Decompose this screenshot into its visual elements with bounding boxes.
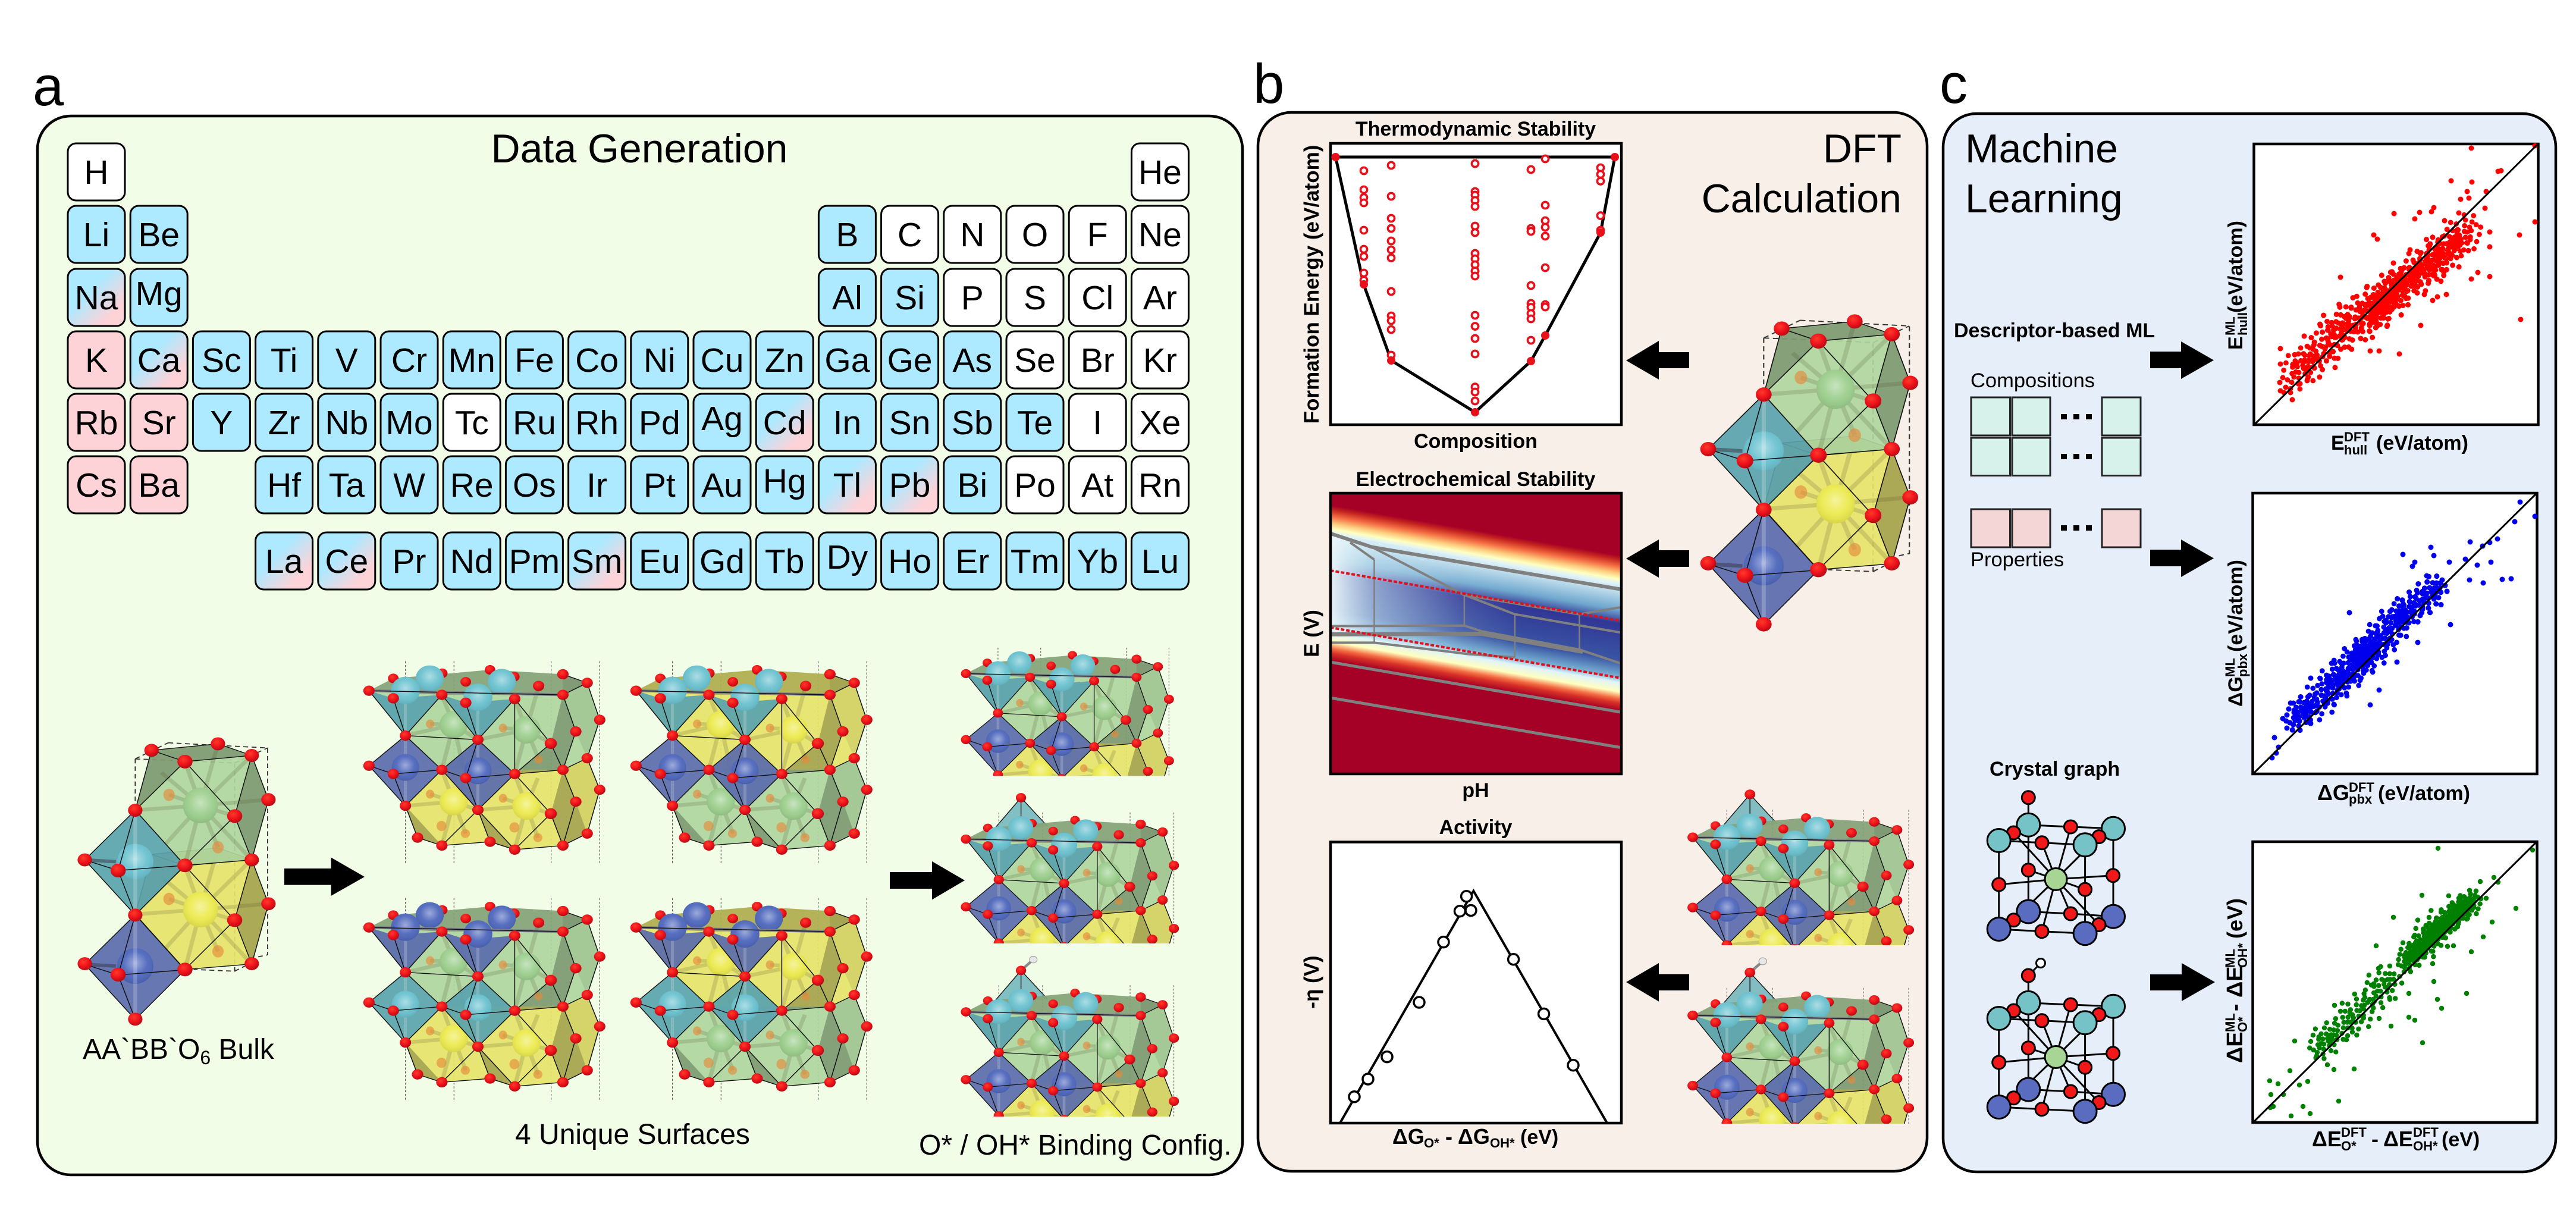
panel background: DFT calculation [1258,112,1927,1171]
periodic table: Re [450,466,494,504]
chart: thermodynamic stability [1300,118,1621,453]
plot frame [2253,842,2537,1122]
periodic table: Ho [888,543,931,581]
chart title: Electrochemical Stability [1356,468,1595,491]
periodic table: P [961,279,984,317]
panel background: machine learning [1943,114,2556,1172]
x axis label: ΔG [1458,1124,1490,1149]
periodic table: Se [1014,341,1056,380]
periodic table: Tc [455,404,489,442]
periodic table: At [1081,466,1113,504]
y axis label: ML [2223,316,2238,335]
y axis label: Formation Energy (eV/atom) [1300,145,1323,424]
periodic table: Ag [701,400,743,438]
heading: DFT calculation: Calculation [1702,176,1902,221]
periodic table: Ne [1138,216,1182,254]
periodic table: Ga [824,341,870,380]
y axis label: ΔG [2224,676,2247,707]
bulk caption: 6 [200,1047,211,1068]
surface structure 4 [630,898,873,1100]
periodic table: Cd [763,404,807,442]
chart title: Thermodynamic Stability [1356,118,1596,140]
chart frame [1331,842,1621,1123]
x axis label: DFT [2344,429,2370,444]
x axis label: (eV) [1520,1126,1558,1149]
periodic table: Au [701,466,743,504]
periodic table: Y [210,404,233,442]
y axis label: hull [2235,312,2250,335]
x axis label: DFT [2413,1125,2439,1140]
scatter points [2272,502,2535,758]
bulk perovskite structure [1700,314,1918,632]
periodic table: Yb [1077,543,1118,581]
heading: machine learning: Learning [1965,176,2123,221]
periodic table: Cl [1081,279,1113,317]
periodic table: Cr [391,341,427,380]
periodic table: Hf [267,466,301,504]
periodic table: Hg [763,462,807,500]
volcano lines [1340,891,1607,1123]
heading: machine learning: Machine [1965,126,2118,171]
periodic table: Tb [765,543,804,581]
periodic table: Tm [1011,543,1059,581]
x axis label: E [2331,432,2345,454]
x axis label [2312,1125,2480,1153]
plot frame [2253,493,2537,774]
chart frame [1331,493,1621,774]
periodic table: As [953,341,992,380]
crystal graph: O adsorbate [1987,791,2125,945]
periodic table: Ca [137,341,181,380]
x axis label: - [1445,1124,1452,1149]
periodic table: W [393,466,425,504]
x axis label: O* [1424,1136,1439,1150]
periodic table: Pm [509,543,560,581]
periodic table: Cs [76,466,117,504]
plot frame [2254,144,2539,425]
periodic table: Ar [1143,279,1177,317]
bulk caption: AA`BB`O [83,1034,200,1065]
bulk perovskite structure [77,737,275,1026]
crystal graph heading: Crystal graph [1990,758,2120,780]
water stability window [1331,570,1620,678]
x axis label: ΔE [2383,1127,2413,1151]
periodic table: C [898,216,922,254]
adsorbate structure: O [1687,789,1914,945]
arrow to electrochemical stability [1626,540,1689,578]
arrow to hull parity plot [2150,341,2214,379]
chart frame [1331,143,1621,425]
panel label a: a [33,55,64,117]
x axis label: (eV) [2442,1128,2480,1151]
x axis label: pH [1462,779,1489,802]
panel label c: c [1940,52,1968,115]
periodic table: Cu [701,341,743,380]
periodic table: S [1024,279,1046,317]
x axis label: pbx [2349,792,2373,807]
periodic table: Ce [325,543,368,581]
heading: DFT calculation: DFT [1823,126,1902,171]
periodic table: Pt [644,466,676,504]
periodic table: Bi [957,466,987,504]
data points [1349,891,1579,1102]
convex hull line [1336,157,1615,412]
x axis label: hull [2344,443,2367,457]
y axis label: ML [2223,949,2238,968]
periodic table: Si [895,279,925,317]
periodic table: Sm [572,543,622,581]
x axis label: ΔE [2312,1127,2342,1151]
x axis label [2331,429,2468,457]
x axis label: ΔG [1392,1124,1425,1149]
parity line [2254,144,2538,425]
crystal graph: OH adsorbate [1987,959,2125,1123]
periodic table: Mn [448,341,495,380]
periodic table: Nd [450,543,494,581]
composition descriptor grid [1971,397,2141,476]
periodic table: Zr [268,404,300,442]
y axis label: ΔE [2223,966,2248,998]
y axis label [2223,560,2250,707]
periodic table: Eu [639,543,680,581]
surfaces caption: 4 Unique Surfaces [515,1119,750,1150]
parity plot: Pourbaix decomposition energy [2223,493,2537,807]
panel: machine learning [1943,114,2556,1172]
y axis label: ML [2223,1013,2238,1032]
binding configuration caption: O* / OH* Binding Config. [919,1130,1232,1161]
y axis label [2223,221,2250,350]
periodic table: Ti [271,341,297,380]
surface structure 3 [363,898,605,1100]
scatter points [2270,848,2533,1116]
surface structure 2 [630,661,873,863]
chart: electrochemical stability [1304,471,1623,801]
periodic table: Sc [202,341,241,380]
y axis label: OH* [2235,943,2250,968]
periodic table: Rb [75,404,118,442]
arrow to activity [1626,963,1689,1002]
periodic table: Dy [827,538,868,576]
periodic table: K [85,341,108,380]
stable compositions on the hull [1331,153,1619,416]
heading: data generation: Data Generation [491,126,787,171]
y axis label: ΔE [2223,1031,2248,1063]
periodic table: Mo [385,404,433,442]
periodic table: Gd [699,543,745,581]
adsorbate structure: OH [1687,958,1914,1124]
x axis label: OH* [2413,1139,2438,1153]
arrow: bulk to surfaces [284,858,365,896]
periodic table: Fe [514,341,554,380]
arrow to thermodynamic stability [1626,341,1689,380]
periodic table: Ni [644,341,676,380]
periodic table: Na [75,279,118,317]
x axis label: O* [2341,1139,2357,1153]
x axis label: Composition [1414,430,1538,453]
unstable compositions [1360,155,1604,405]
periodic table: H [84,153,109,192]
bulk caption: Bulk [211,1034,275,1065]
periodic table: Ir [586,466,607,504]
y axis label: - [2223,1004,2248,1011]
periodic table: Xe [1140,404,1181,442]
x axis label: ΔG [2317,780,2349,805]
panel background: data generation [37,116,1242,1175]
arrow to binding energy parity plot [2150,963,2215,1001]
binding configuration: OH adsorbate [961,955,1179,1117]
periodic table: He [1138,153,1182,192]
y axis label: O* [2235,1017,2250,1032]
periodic table: V [335,341,358,380]
periodic table: Te [1017,404,1053,442]
periodic table: Zn [765,341,804,380]
periodic table: Pb [889,466,930,504]
x axis label: (eV/atom) [2378,782,2470,805]
periodic table: B [836,216,858,254]
x axis label: OH* [1490,1136,1515,1150]
chart title: Activity [1439,816,1512,839]
properties label: Properties [1971,548,2064,571]
scatter points [2273,146,2535,400]
periodic table: Sr [142,404,176,442]
periodic table [68,143,1188,590]
panel label b: b [1253,52,1284,115]
periodic table: Li [83,216,109,254]
periodic table: Be [138,216,180,254]
periodic table: Pr [393,543,426,581]
compositions label: Compositions [1971,369,2095,392]
periodic table: Nb [325,404,368,442]
y axis label: E [2224,336,2247,350]
periodic table: Ge [887,341,933,380]
heatmap [1332,494,1620,773]
x axis label: DFT [2349,780,2374,795]
y axis label [2223,898,2250,1063]
periodic table: Er [955,543,989,581]
parity plot: binding energy difference [2223,842,2537,1153]
arrow to Pourbaix parity plot [2150,540,2214,577]
x axis label: DFT [2341,1125,2367,1140]
periodic table: I [1093,404,1102,442]
x axis label [2317,780,2470,807]
periodic table: In [833,404,861,442]
descriptor heading: Descriptor-based ML [1954,319,2155,342]
periodic table: Tl [833,466,861,504]
periodic table: Sn [889,404,930,442]
periodic table: F [1087,216,1108,254]
periodic table: Rh [575,404,619,442]
periodic table: Os [513,466,556,504]
arrow: surfaces to binding configurations [890,861,965,899]
x axis label [1392,1124,1558,1150]
periodic table: Al [832,279,862,317]
stability phase boundaries [1331,534,1620,747]
panel: data generation [37,116,1242,1175]
periodic table: Br [1081,341,1115,380]
periodic table: Mg [136,275,183,313]
periodic table: Po [1014,466,1056,504]
periodic table: Rn [1138,466,1182,504]
periodic table: Ba [138,466,180,504]
y axis label: (eV/atom) [2224,560,2247,652]
parity line [2253,842,2537,1122]
panel: DFT calculation [1258,112,1927,1177]
periodic table: La [265,543,303,581]
y axis label: pbx [2235,653,2250,677]
y axis label: -η (V) [1300,955,1323,1009]
binding configuration: O adsorbate [961,793,1179,943]
y axis label: (eV) [2223,898,2247,939]
x axis label: - [2371,1127,2379,1151]
parity line [2253,493,2537,774]
periodic table: Ru [513,404,556,442]
periodic table: Sb [952,404,993,442]
periodic table: N [960,216,984,254]
parity plot: hull energy [2223,144,2539,457]
periodic table: Ta [329,466,365,504]
y axis label: E (V) [1300,610,1323,657]
chart: activity volcano [1300,816,1621,1150]
y axis label: ML [2223,658,2238,677]
periodic table: Lu [1141,543,1179,581]
periodic table: O [1022,216,1048,254]
x axis label: (eV/atom) [2376,432,2468,454]
y axis label: (eV/atom) [2224,221,2247,313]
periodic table: Pd [639,404,680,442]
periodic table: Co [575,341,619,380]
periodic table: Kr [1143,341,1177,380]
property descriptor row [1971,509,2141,547]
binding configuration: bare surface [961,647,1174,776]
surface structure 1 [363,661,605,863]
